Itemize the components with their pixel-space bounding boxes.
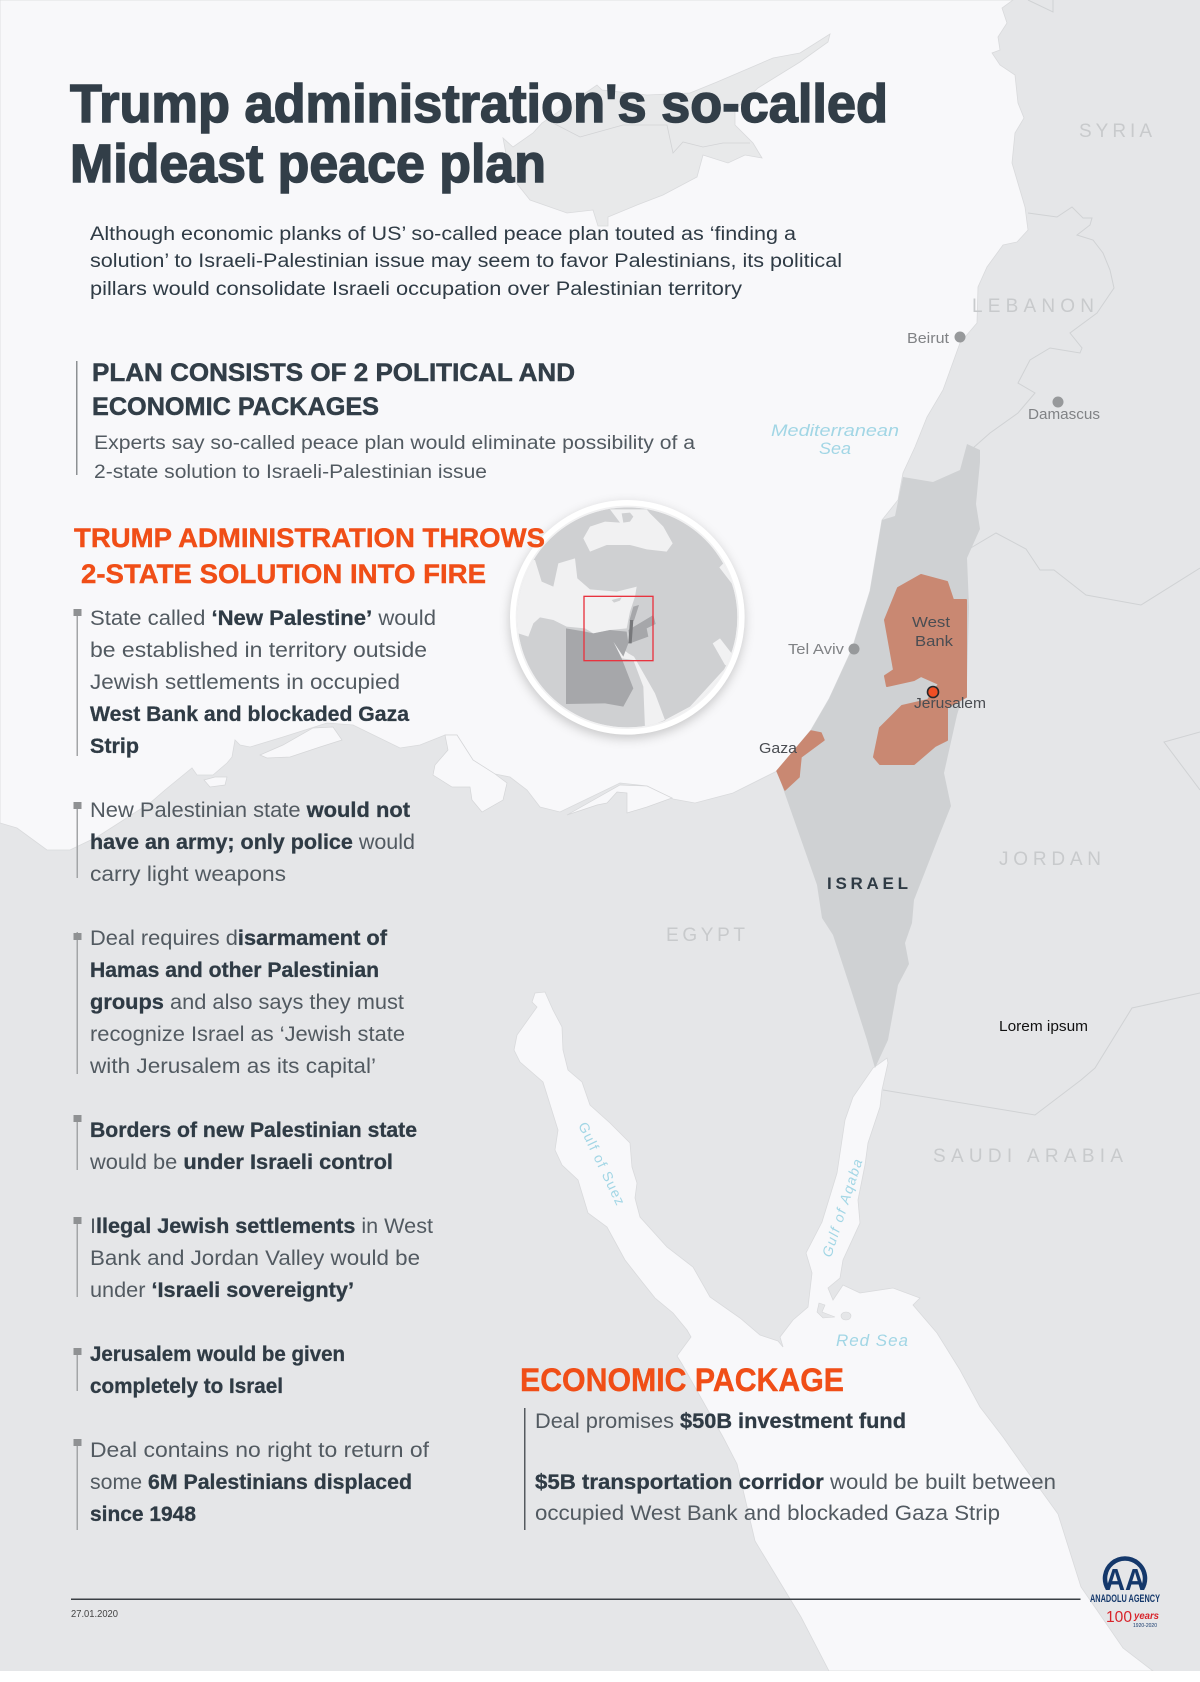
logo: anadolu agency: 1920-2020 [1133,1623,1157,1629]
intro text: solution’ to Israeli-Palestinian issue may seem to favor Palestinians, its political [90,251,842,272]
label: jerusalem [914,686,986,712]
point: disarmament: Hamas and other Palestinian [90,959,379,982]
point: new palestine: Jewish settlements in occupied [90,671,400,694]
title [70,74,888,194]
label: jordan: JORDAN [999,849,1101,870]
nile delta lagoons [204,727,672,815]
economic text: occupied West Bank and blockaded Gaza Strip [535,1502,1000,1525]
experts text: Experts say so-called peace plan would eliminate possibility of a [94,433,695,454]
point: new palestine: Strip [90,735,139,758]
point: disarmament [74,927,405,1078]
point: settlements [74,1215,433,1302]
intro text: pillars would consolidate Israeli occupation over Palestinian territory [90,279,743,300]
point: disarmament: groups and also says they must [90,991,404,1014]
label: west bank: West [912,614,951,631]
heading: economic package: ECONOMIC PACKAGE [520,1362,844,1398]
cyprus [503,34,830,226]
logo: anadolu agency [1090,1558,1160,1629]
point: new palestine: State called ‘New Palestine’ would [90,607,436,630]
point: settlements: under ‘Israeli sovereignty’ [90,1279,354,1302]
point: disarmament: recognize Israel as ‘Jewish state [90,1023,405,1046]
logo: anadolu agency: 100 [1106,1609,1132,1626]
point: settlements: Illegal Jewish settlements in West [90,1215,433,1238]
intro text [90,224,842,300]
panel: economic package [520,1362,1056,1530]
heading: plan consists [92,359,575,421]
country borders [883,0,1200,1115]
label: jerusalem: Jerusalem [914,695,986,712]
title: Mideast peace plan [70,134,546,194]
point: right of return: since 1948 [90,1503,196,1526]
label: lorem ipsum: Lorem ipsum [999,1018,1088,1035]
bottom edge [0,1671,1200,1682]
point: borders: would be under Israeli control [89,1151,393,1174]
israel territory [777,444,980,1068]
point: no army [74,799,415,886]
city: beirut [907,330,966,347]
point: jerusalem: completely to Israel [90,1375,283,1398]
label: red sea: Red Sea [836,1331,908,1350]
heading: 2-state solution: TRUMP ADMINISTRATION THROWS [74,523,545,553]
point: right of return [74,1439,429,1530]
label: israel: ISRAEL [827,874,908,893]
point: borders [74,1115,417,1174]
date: 27.01.2020 [71,1609,118,1620]
heading: plan consists: ECONOMIC PACKAGES [92,393,379,421]
title: Trump administration's so-called [70,74,888,134]
label: west bank: Bank [915,633,954,650]
point: settlements: Bank and Jordan Valley would be [90,1247,420,1270]
locator globe [500,500,757,747]
point: no army: have an army; only police would [90,831,415,854]
red sea and gulfs [514,992,1153,1671]
point: disarmament: Deal requires d isarmament of [90,927,388,950]
city: damascus: Damascus [1028,406,1100,423]
label: gulf of suez: Gulf of Suez [575,1119,628,1208]
gaza strip [777,731,824,790]
point: jerusalem: Jerusalem would be given [90,1343,345,1366]
label: mediterranean sea: Sea [819,439,851,458]
label: mediterranean sea: Mediterranean [771,421,899,440]
intro text: Although economic planks of US’ so-called peace plan touted as ‘finding a [90,224,796,245]
economic text: Deal promises $50B investment fund [535,1410,906,1433]
city: beirut: Beirut [907,330,950,347]
heading: plan consists: PLAN CONSISTS OF 2 POLITICAL AND [92,359,575,387]
heading: 2-state solution: 2-STATE SOLUTION INTO FIRE [81,559,486,589]
point: borders: Borders of new Palestinian state [90,1119,417,1142]
economic text [535,1410,1056,1525]
point: no army: carry light weapons [90,863,286,886]
mediterranean sea [0,0,1028,850]
logo: anadolu agency: ANADOLU AGENCY [1090,1593,1160,1605]
point: new palestine: be established in territory outside [90,639,427,662]
point: new palestine: West Bank and blockaded Gaza [90,703,409,726]
panel: plan summary [76,359,695,483]
experts text [94,433,695,483]
label: saudi arabia: SAUDI ARABIA [933,1146,1123,1167]
label: syria: SYRIA [1079,121,1152,142]
map labels [575,121,1152,1350]
logo: anadolu agency: AA [1105,1562,1145,1597]
logo: anadolu agency: years [1133,1611,1159,1622]
experts text: 2-state solution to Israeli-Palestinian issue [94,462,487,483]
label: lebanon: LEBANON [972,296,1094,317]
islands in red sea [817,1303,851,1320]
heading: 2-state solution [74,523,545,589]
west bank [874,575,966,764]
footer rule [71,1598,1080,1600]
label: gulf of aqaba: Gulf of Aqaba [819,1157,865,1259]
point: right of return: Deal contains no right to return of [90,1439,429,1462]
point: jerusalem [74,1343,345,1398]
label: gaza: Gaza [759,740,798,757]
label: west bank [912,614,954,650]
city: tel aviv: Tel Aviv [788,641,845,658]
point: no army: New Palestinian state would not [90,799,410,822]
city: damascus [1028,396,1100,423]
point: right of return: some 6M Palestinians displaced [90,1471,412,1494]
label: egypt: EGYPT [666,925,745,946]
economic text: $5B transportation corridor would be built between [535,1471,1056,1494]
panel: political points [74,607,436,1530]
point: disarmament: with Jerusalem as its capital’ [89,1055,376,1078]
point: new palestine [74,607,436,758]
label: mediterranean sea [771,421,899,458]
